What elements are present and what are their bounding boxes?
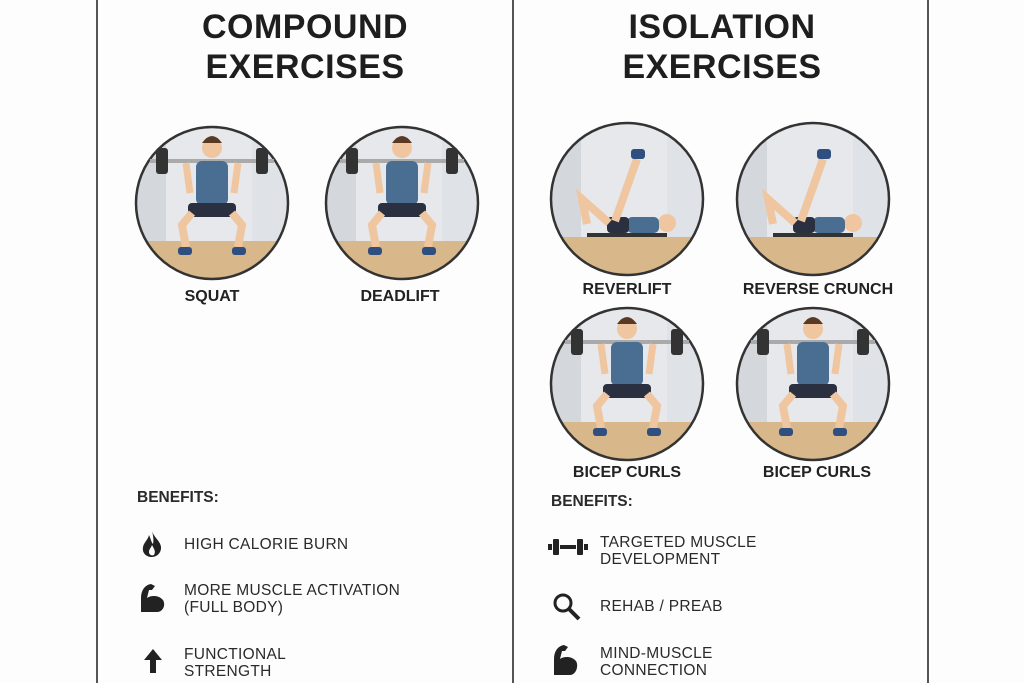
title: isolation [622,8,822,86]
icon: magnifier [554,594,580,620]
benefits heading right: BENEFITS: [551,493,633,510]
icon: up arrow [144,649,162,673]
divider lines [96,0,98,683]
title: compound: EXERCISES [205,48,405,86]
illustration: bicep curls 1 [550,306,704,462]
title: isolation: EXERCISES [622,48,822,86]
benefits heading left: BENEFITS: [137,489,219,506]
text more muscle activation: MORE MUSCLE ACTIVATION [184,582,400,599]
text functional strength [184,646,286,680]
text high calorie burn: HIGH CALORIE BURN [184,536,348,553]
label reverse crunch: REVERSE CRUNCH [743,281,893,298]
title: isolation: ISOLATION [628,8,816,46]
icon: muscle [141,584,164,612]
text targeted muscle: TARGETED MUSCLE [600,534,757,551]
title: compound [202,8,408,86]
text mind-muscle [600,645,713,679]
text functional strength: STRENGTH [184,663,272,680]
illustration: squat [134,126,290,280]
illustration: reverse crunch [736,122,890,276]
illustration: bicep curls 2 [736,306,890,462]
text rehab: REHAB / PREAB [600,598,723,615]
text mind-muscle: MIND-MUSCLE [600,645,713,662]
text targeted muscle: DEVELOPMENT [600,551,720,568]
illustration: reverlift [550,122,704,276]
label bicep curls 1: BICEP CURLS [573,464,681,481]
illustration: deadlift [324,126,480,280]
text more muscle activation: (FULL BODY) [184,599,283,616]
text mind-muscle: CONNECTION [600,662,707,679]
label bicep curls 2: BICEP CURLS [763,464,871,481]
label deadlift: DEADLIFT [360,288,440,305]
label reverlift: REVERLIFT [583,281,671,298]
icon: muscle right [554,645,578,675]
text targeted muscle [600,534,757,568]
icon: dumbbell [548,539,588,555]
text functional strength: FUNCTIONAL [184,646,286,663]
text more muscle activation [184,582,400,616]
title: compound: COMPOUND [202,8,408,46]
label squat: SQUAT [185,288,239,305]
icon: flame [142,531,161,557]
